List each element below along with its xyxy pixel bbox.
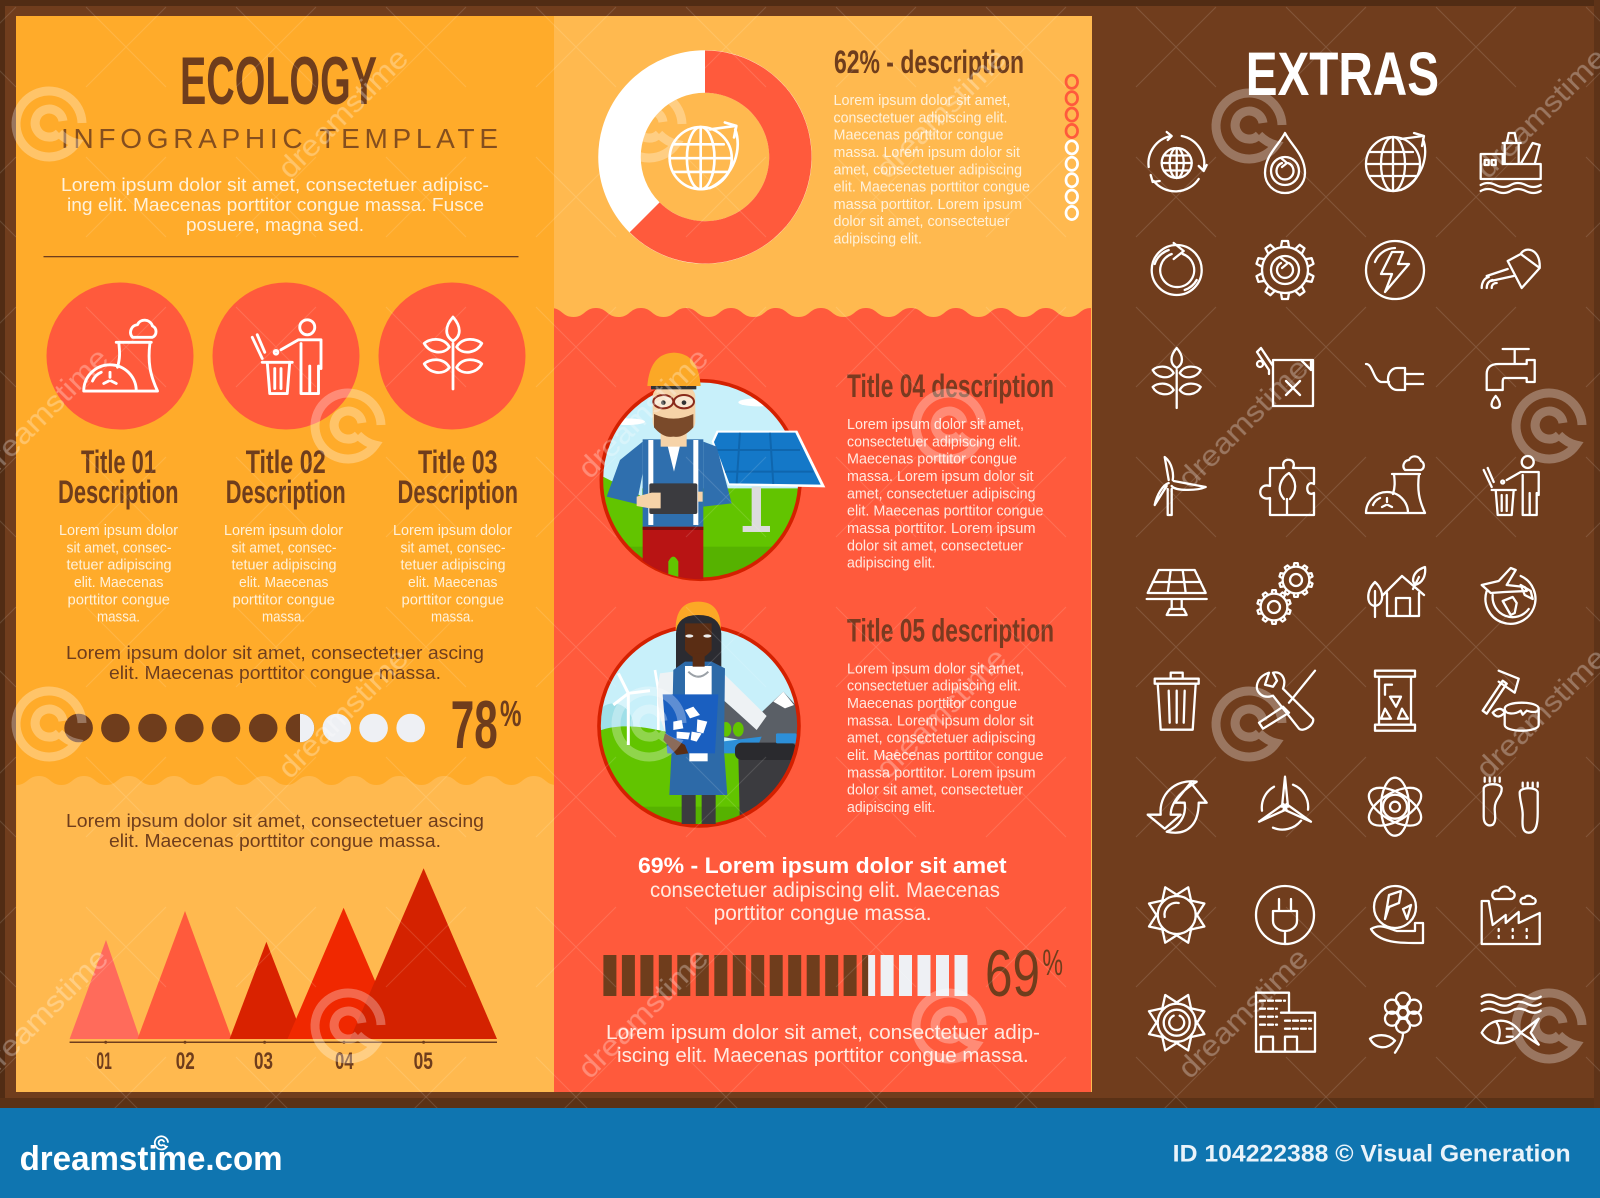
panel: left column: [16, 16, 556, 1092]
icon: atom: [1363, 778, 1427, 836]
heading: title 05: Title 05 description: [847, 613, 1054, 649]
column 1 text: porttitor congue: [68, 591, 170, 608]
caption above dots: [66, 642, 484, 683]
divider: [44, 256, 518, 257]
left panel lower wave area: [16, 776, 556, 1092]
69 percent value: %: [1042, 942, 1063, 983]
triangle chart: 03: [254, 1048, 273, 1075]
title: ECOLOGY: [180, 43, 377, 119]
icon: trash bin: [1155, 673, 1199, 730]
icon: footprints: [1484, 778, 1538, 833]
heading: title 04: Title 04 description: [847, 368, 1054, 404]
icon: buildings: [1256, 993, 1315, 1052]
title 04 body text: consectetuer adipiscing elit.: [847, 433, 1021, 450]
title 05 body text: Maecenas porttitor congue: [847, 695, 1017, 712]
62% body text: amet, consectetuer adipiscing: [834, 161, 1022, 178]
footer text of center panel: [606, 1021, 1040, 1067]
icon: axe and stump: [1483, 671, 1539, 731]
center panel red wave area: [551, 308, 1091, 1092]
watermark text: dreamstime: [572, 942, 715, 1085]
column 2 heading: Description: [226, 474, 346, 510]
watermark text: dreamstime: [1172, 942, 1315, 1085]
triangle chart: 05: [414, 1048, 433, 1075]
icon: eco house: [1368, 567, 1425, 617]
column 1 text: tetuer adipiscing: [66, 557, 172, 574]
column 3 text: [393, 522, 512, 626]
left panel background: [16, 16, 554, 1092]
column 2 text: Lorem ipsum dolor: [224, 522, 343, 539]
column 3 text: tetuer adipiscing: [400, 557, 506, 574]
icon: solar panel: [1147, 570, 1207, 615]
column 3 text: elit. Maecenas: [408, 574, 498, 591]
watermark text: dreamstime: [272, 642, 415, 785]
footer logo swirl: [155, 1136, 168, 1150]
title 05 body text: amet, consectetuer adipiscing: [847, 730, 1036, 747]
watermark text: dreamstime: [870, 642, 1013, 785]
column 2 text: [224, 522, 343, 626]
title 04 body text: massa. Lorem ipsum dolor sit: [847, 468, 1034, 485]
icon: water drop: [1265, 133, 1305, 193]
62% body text: massa porttitor. Lorem ipsum: [834, 196, 1022, 213]
icon: wrench and screwdriver: [1257, 671, 1315, 730]
icon: recycle arrows: [1148, 781, 1207, 833]
title 04 body text: amet, consectetuer adipiscing: [847, 485, 1036, 502]
icon: globe with arrow: [1366, 133, 1425, 191]
column 1 text: sit amet, consec-: [66, 539, 172, 556]
title 04 body text: adipiscing elit.: [847, 555, 935, 572]
panel: center column: [551, 16, 1092, 1092]
panel: extras: [1146, 40, 1541, 1054]
title 05 body text: dolor sit amet, consectetuer: [847, 782, 1023, 799]
caption above dots: elit. Maecenas porttitor congue massa.: [109, 662, 441, 683]
title 05 body text: [847, 660, 1044, 816]
62% body text: consectetuer adipiscing elit.: [834, 109, 1008, 126]
78 percent value: 78: [451, 687, 498, 763]
title 05 body text: massa porttitor. Lorem ipsum: [847, 764, 1036, 781]
icon: sun with circle: [1146, 992, 1208, 1054]
footer text of center panel: Lorem ipsum dolor sit amet, consectetuer adip-: [606, 1021, 1040, 1044]
column 2 text: porttitor congue: [232, 591, 335, 608]
column 1 text: elit. Maecenas: [74, 574, 164, 591]
title 04 body text: massa porttitor. Lorem ipsum: [847, 520, 1036, 537]
circle icon: plant: [378, 282, 526, 430]
title 05 body text: adipiscing elit.: [847, 799, 935, 816]
frame right edge: [1594, 0, 1600, 1108]
bar progress 69%: [603, 955, 968, 996]
triangle chart: 02: [176, 1048, 195, 1075]
icon: earth and plane: [1482, 568, 1535, 624]
69% statement: consectetuer adipiscing elit. Maecenas: [650, 879, 1000, 902]
watermark text: dreamstime: [1470, 42, 1600, 185]
column 1 heading: Title 01: [81, 444, 156, 480]
icon: circular arrow: [1152, 243, 1202, 295]
69 percent value: 69: [985, 936, 1040, 1010]
column 3 text: porttitor congue: [402, 591, 504, 608]
icon: oil rig: [1481, 133, 1541, 193]
icon: plug with cord: [1366, 364, 1423, 390]
caption above dots: Lorem ipsum dolor sit amet, consectetuer ascing: [66, 642, 484, 663]
triangle chart: [70, 868, 497, 1075]
icon: two gears: [1257, 563, 1313, 624]
column 2 text: tetuer adipiscing: [232, 557, 336, 574]
62% body text: adipiscing elit.: [834, 230, 922, 247]
title 05 body text: elit. Maecenas porttitor congue: [847, 747, 1044, 764]
62% body text: dolor sit amet, consectetuer: [834, 213, 1010, 230]
column 2 text: elit. Maecenas: [239, 574, 328, 591]
title 04 body text: dolor sit amet, consectetuer: [847, 537, 1023, 554]
column 3 heading: Title 03: [418, 444, 498, 480]
column 3 heading: [398, 444, 518, 510]
ring progress stack: [1066, 75, 1078, 220]
watermark text: dreamstime: [1172, 352, 1315, 495]
62% body text: Maecenas porttitor congue: [834, 127, 1004, 144]
column 3 text: sit amet, consec-: [400, 539, 506, 556]
title 05 body text: massa. Lorem ipsum dolor sit: [847, 712, 1034, 729]
caption above chart: elit. Maecenas porttitor congue massa.: [109, 830, 441, 851]
icon: nuclear plant: [1366, 456, 1425, 513]
icon: turbine blades in cycle: [1258, 777, 1312, 830]
intro text: posuere, magna sed.: [186, 214, 364, 235]
icon: plant: [1153, 348, 1201, 408]
intro text: [61, 174, 489, 235]
caption above chart: [66, 810, 484, 851]
title 05 body text: consectetuer adipiscing elit.: [847, 678, 1021, 695]
footer credit: ID 104222388 © Visual Generation: [1173, 1141, 1571, 1168]
icon: person and bin: [1484, 456, 1539, 515]
extras heading: EXTRAS: [1246, 40, 1439, 108]
icon: sun: [1146, 884, 1208, 946]
intro text: ing elit. Maecenas porttitor congue massa. Fusce: [67, 194, 484, 215]
column 2 text: massa.: [262, 609, 305, 626]
footer text of center panel: iscing elit. Maecenas porttitor congue massa.: [617, 1044, 1029, 1067]
title 04 body text: Lorem ipsum dolor sit amet,: [847, 416, 1024, 433]
column 2 heading: [226, 444, 346, 510]
column 3 text: Lorem ipsum dolor: [393, 522, 512, 539]
center panel upper background: [554, 16, 1092, 1092]
watermark text: dreamstime: [1470, 642, 1600, 785]
62% heading: 62% - description: [834, 44, 1024, 80]
62% body text: elit. Maecenas porttitor congue: [834, 179, 1030, 196]
icon: gear: [1256, 241, 1314, 299]
watermark swirls: [16, 91, 1582, 1059]
78 percent value: %: [500, 693, 522, 734]
icon: fish and waves: [1482, 995, 1541, 1045]
icon: watering can: [1482, 250, 1540, 288]
frame top edge: [0, 0, 1600, 6]
dot progress 78%: [64, 714, 425, 742]
title 04 body text: [847, 416, 1044, 572]
icon: fuel canister: [1257, 348, 1313, 406]
illustration: engineer with solar panel: [590, 353, 825, 593]
icon: wind turbine: [1155, 457, 1206, 515]
watermark text: dreamstime: [572, 342, 715, 485]
triangle chart: 04: [335, 1048, 354, 1075]
column 2 text: sit amet, consec-: [232, 539, 337, 556]
69% statement: porttitor congue massa.: [714, 902, 932, 925]
column 3 heading: Description: [398, 474, 518, 510]
circle icon: nuclear plant: [46, 282, 194, 430]
footer bar: [0, 1108, 1600, 1198]
icon: plug in circle: [1256, 886, 1314, 944]
icon: globe in hand: [1371, 886, 1423, 943]
frame left edge: [0, 0, 5, 1108]
triangle chart: 01: [96, 1048, 112, 1075]
title 05 body text: Lorem ipsum dolor sit amet,: [847, 660, 1024, 677]
illustration: woman with recycling bin: [593, 602, 803, 833]
69% statement: 69% - Lorem ipsum dolor sit amet: [638, 853, 1007, 878]
icon: flower: [1370, 993, 1421, 1053]
column 2 heading: Title 02: [246, 444, 326, 480]
donut chart 62%: [620, 50, 812, 264]
title 04 body text: Maecenas porttitor congue: [847, 451, 1017, 468]
frame bottom edge: [0, 1098, 1600, 1108]
62% body text: massa. Lorem ipsum dolor sit: [834, 144, 1021, 161]
icon: globe with cycle arrows: [1148, 132, 1207, 191]
title 04 body text: elit. Maecenas porttitor congue: [847, 503, 1044, 520]
column 1 text: Lorem ipsum dolor: [59, 522, 178, 539]
watermark text: dreamstime: [272, 42, 415, 185]
icon: water tap: [1487, 349, 1535, 408]
footer background: [0, 1108, 1600, 1198]
column 1 heading: Description: [58, 474, 178, 510]
subtitle: INFOGRAPHIC TEMPLATE: [61, 123, 498, 154]
column 1 text: [59, 522, 178, 626]
icon: puzzle with leaf: [1260, 460, 1314, 515]
icon: lightning in circle: [1366, 241, 1424, 299]
icon: factory with smoke: [1482, 886, 1540, 944]
column 1 heading: [58, 444, 178, 510]
62% body text: Lorem ipsum dolor sit amet,: [834, 92, 1010, 109]
intro text: Lorem ipsum dolor sit amet, consectetuer adipisc-: [61, 174, 489, 195]
column 1 text: massa.: [97, 609, 140, 626]
62% body text: [834, 92, 1030, 247]
caption above chart: Lorem ipsum dolor sit amet, consectetuer ascing: [66, 810, 484, 831]
column 3 text: massa.: [431, 609, 474, 626]
icon: radioactive barrel: [1375, 671, 1415, 731]
circle icon: person with trash bin: [212, 282, 360, 430]
footer logo text: dreamstime.com: [20, 1140, 283, 1178]
69% statement: [638, 853, 1007, 925]
watermark text: dreamstime: [870, 42, 1013, 185]
